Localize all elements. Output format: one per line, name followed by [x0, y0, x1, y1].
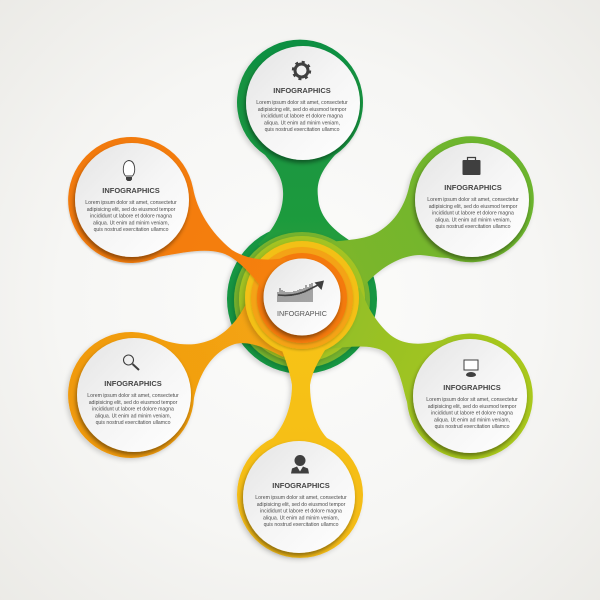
heading and text: aliqua. Ut enim ad minim veniam, [263, 515, 339, 521]
icon: light bulb [123, 160, 135, 181]
heading and text: quis nostrud exercitation ullamco [94, 227, 169, 233]
icon: person [291, 455, 309, 474]
heading and text: INFOGRAPHICS [443, 383, 501, 392]
center label: INFOGRAPHIC [277, 309, 327, 318]
heading and text: INFOGRAPHICS [273, 86, 331, 95]
heading and text: quis nostrud exercitation ullamco [265, 127, 340, 133]
white disc [243, 441, 355, 553]
heading and text: Lorem ipsum dolor sit amet, consectetur [426, 397, 518, 403]
heading and text [426, 383, 518, 430]
heading and text: incididunt ut labore et dolore magna [260, 509, 342, 515]
panel: center disc [264, 258, 340, 336]
icon: monitor [464, 360, 478, 377]
icon: rising bar chart with arrow [278, 280, 324, 302]
heading and text: incididunt ut labore et dolore magna [261, 114, 343, 120]
heading and text: Lorem ipsum dolor sit amet, consectetur [85, 200, 177, 206]
heading and text: adipisicing elit, sed do eiusmod tempor [87, 207, 176, 213]
heading and text: aliqua. Ut enim ad minim veniam, [434, 417, 510, 423]
lower right arm with ring [239, 236, 533, 460]
heading and text: aliqua. Ut enim ad minim veniam, [264, 120, 340, 126]
panel: upper left orange node [68, 137, 347, 343]
heading and text: adipisicing elit, sed do eiusmod tempor [89, 400, 178, 406]
heading and text: adipisicing elit, sed do eiusmod tempor [428, 404, 517, 410]
heading and text: aliqua. Ut enim ad minim veniam, [95, 413, 171, 419]
heading and text: quis nostrud exercitation ullamco [435, 424, 510, 430]
panel: upper right green node [234, 136, 534, 368]
heading and text: INFOGRAPHICS [104, 379, 162, 388]
upper left arm with ring [68, 137, 347, 343]
heading and text: adipisicing elit, sed do eiusmod tempor [429, 204, 518, 210]
white disc [413, 339, 527, 453]
heading and text [255, 481, 347, 528]
heading and text: Lorem ipsum dolor sit amet, consectetur [255, 495, 347, 501]
heading and text: Lorem ipsum dolor sit amet, consectetur [87, 393, 179, 399]
heading and text: Lorem ipsum dolor sit amet, consectetur [256, 100, 348, 106]
icon: briefcase [462, 158, 480, 175]
bottom arm with ring [237, 241, 363, 558]
inner orange-yellow ring [251, 247, 353, 349]
heading and text: aliqua. Ut enim ad minim veniam, [93, 220, 169, 226]
white disc [415, 143, 529, 257]
white disc [75, 143, 189, 257]
heading and text: adipisicing elit, sed do eiusmod tempor [258, 107, 347, 113]
panel: lower left orange node [68, 295, 300, 458]
white center disc [264, 258, 340, 336]
heading and text: Lorem ipsum dolor sit amet, consectetur [427, 197, 519, 203]
top arm with ring [227, 40, 377, 374]
heading and text: aliqua. Ut enim ad minim veniam, [435, 217, 511, 223]
heading and text: incididunt ut labore et dolore magna [431, 411, 513, 417]
heading and text: quis nostrud exercitation ullamco [96, 420, 171, 426]
heading and text [85, 186, 177, 233]
panel: lower right lime node [239, 236, 533, 460]
heading and text [256, 86, 348, 133]
panel: bottom yellow node [237, 241, 363, 558]
white disc [246, 46, 360, 160]
heading and text: incididunt ut labore et dolore magna [90, 214, 172, 220]
heading and text: adipisicing elit, sed do eiusmod tempor [257, 502, 346, 508]
icon: magnifier [124, 355, 139, 370]
upper right arm with ring [234, 136, 534, 368]
heading and text: INFOGRAPHICS [102, 186, 160, 195]
heading and text [87, 379, 179, 426]
heading and text: quis nostrud exercitation ullamco [264, 522, 339, 528]
panel: top green node [227, 40, 377, 374]
heading and text: incididunt ut labore et dolore magna [92, 407, 174, 413]
icon: gear [293, 62, 310, 79]
heading and text: INFOGRAPHICS [272, 481, 330, 490]
heading and text: INFOGRAPHICS [444, 183, 502, 192]
lower left arm [68, 295, 300, 458]
heading and text: incididunt ut labore et dolore magna [432, 211, 514, 217]
white disc [77, 338, 191, 452]
heading and text [427, 183, 519, 230]
heading and text: quis nostrud exercitation ullamco [436, 224, 511, 230]
